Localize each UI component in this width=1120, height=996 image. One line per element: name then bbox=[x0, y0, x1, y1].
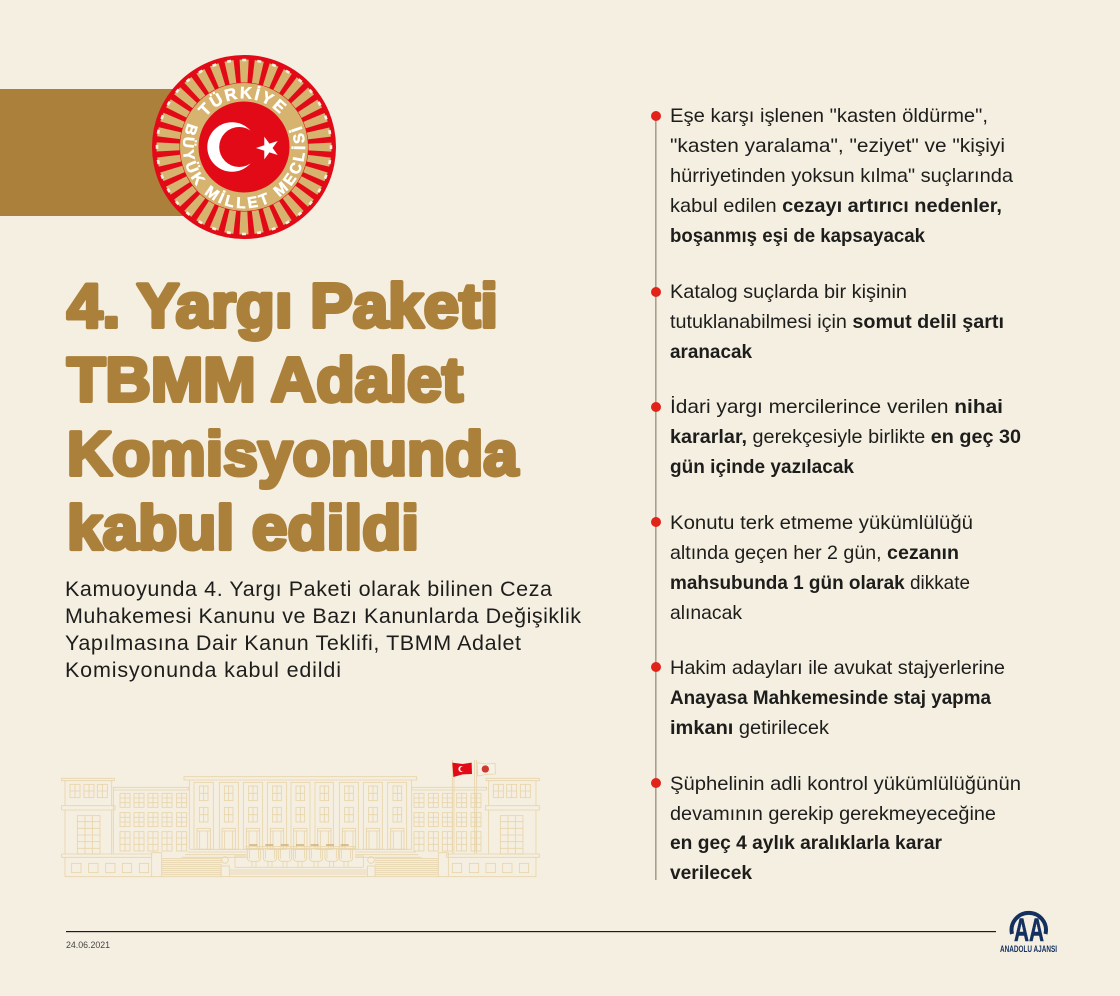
item 4 text: Konutu terk etmeme yükümlülüğü bbox=[670, 512, 973, 534]
intro paragraph bbox=[65, 577, 581, 682]
title: TBMM Adalet bbox=[67, 346, 463, 415]
gold header band bbox=[0, 89, 195, 216]
footer rule bbox=[66, 931, 996, 932]
icon: TBMM seal bbox=[152, 55, 336, 239]
item 3 text bbox=[670, 395, 1021, 478]
item 2 text: tutuklanabilmesi için somut delil şartı bbox=[670, 311, 1004, 333]
item 1 text: boşanmış eşi de kapsayacak bbox=[670, 225, 925, 247]
timeline axis bbox=[655, 116, 657, 880]
item 6 text: en geç 4 aylık aralıklarla karar bbox=[670, 832, 942, 854]
intro paragraph: Muhakemesi Kanunu ve Bazı Kanunlarda Değişiklik bbox=[65, 604, 581, 628]
item 2 text bbox=[670, 281, 1004, 363]
item 1 text: hürriyetinden yoksun kılma" suçlarında bbox=[670, 165, 1013, 187]
item 1 text: Eşe karşı işlenen "kasten öldürme", bbox=[670, 105, 988, 127]
intro paragraph: Yapılmasına Dair Kanun Teklifi, TBMM Adalet bbox=[65, 631, 521, 655]
panel: item 3 bbox=[651, 395, 1021, 478]
item 6 text: devamının gerekip gerekmeyeceğine bbox=[670, 803, 996, 825]
intro paragraph: Komisyonunda kabul edildi bbox=[65, 658, 341, 682]
intro paragraph: Kamuoyunda 4. Yargı Paketi olarak bilinen Ceza bbox=[65, 577, 552, 601]
illustration: parliament building bbox=[62, 760, 539, 877]
item 2 text: aranacak bbox=[670, 341, 752, 363]
item 1 text bbox=[670, 105, 1013, 247]
item 4 text bbox=[670, 512, 973, 624]
item 1 text: kabul edilen cezayı artırıcı nedenler, bbox=[670, 195, 1002, 217]
item 4 text: altında geçen her 2 gün, cezanın bbox=[670, 542, 959, 564]
item 3 text: gün içinde yazılacak bbox=[670, 456, 854, 478]
item 2 text: Katalog suçlarda bir kişinin bbox=[670, 281, 907, 303]
title: kabul edildi bbox=[67, 494, 419, 563]
item 4 text: alınacak bbox=[670, 602, 742, 624]
panel: item 2 bbox=[651, 281, 1004, 363]
item 5 text: Anayasa Mahkemesinde staj yapma bbox=[670, 687, 991, 709]
icon: Anadolu Ajansi logo: ANADOLU AJANSI bbox=[1000, 944, 1057, 954]
icon: Anadolu Ajansi logo bbox=[1000, 912, 1057, 954]
bullet bbox=[651, 111, 661, 121]
icon: Anadolu Ajansi logo: AA bbox=[1014, 912, 1044, 948]
icon: TBMM seal: BÜYÜK MİLLET MECLİSİ bbox=[182, 123, 306, 209]
panel: item 5 bbox=[651, 657, 1005, 739]
item 3 text: İdari yargı mercilerince verilen nihai bbox=[670, 395, 1003, 418]
panel: item 1 bbox=[651, 105, 1013, 247]
title: Komisyonunda bbox=[67, 420, 519, 489]
bullet bbox=[651, 517, 661, 527]
item 5 text bbox=[670, 657, 1005, 739]
item 6 text bbox=[670, 773, 1021, 884]
item 3 text: kararlar, gerekçesiyle birlikte en geç 30 bbox=[670, 426, 1021, 448]
panel: item 6 bbox=[651, 773, 1021, 884]
panel: item 4 bbox=[651, 512, 973, 624]
bullet bbox=[651, 662, 661, 672]
item 4 text: mahsubunda 1 gün olarak dikkate bbox=[670, 572, 970, 594]
item 5 text: Hakim adayları ile avukat stajyerlerine bbox=[670, 657, 1005, 679]
bullet bbox=[651, 402, 661, 412]
item 6 text: Şüphelinin adli kontrol yükümlülüğünün bbox=[670, 773, 1021, 795]
title: 4. Yargı Paketi bbox=[67, 272, 498, 341]
bullet bbox=[651, 287, 661, 297]
bullet bbox=[651, 778, 661, 788]
icon: TBMM seal: TÜRKİYE bbox=[197, 86, 287, 115]
date: 24.06.2021 bbox=[66, 940, 110, 950]
item 5 text: imkanı getirilecek bbox=[670, 717, 829, 739]
item 1 text: "kasten yaralama", "eziyet" ve "kişiyi bbox=[670, 135, 1005, 157]
title bbox=[67, 272, 519, 563]
item 6 text: verilecek bbox=[670, 862, 752, 884]
